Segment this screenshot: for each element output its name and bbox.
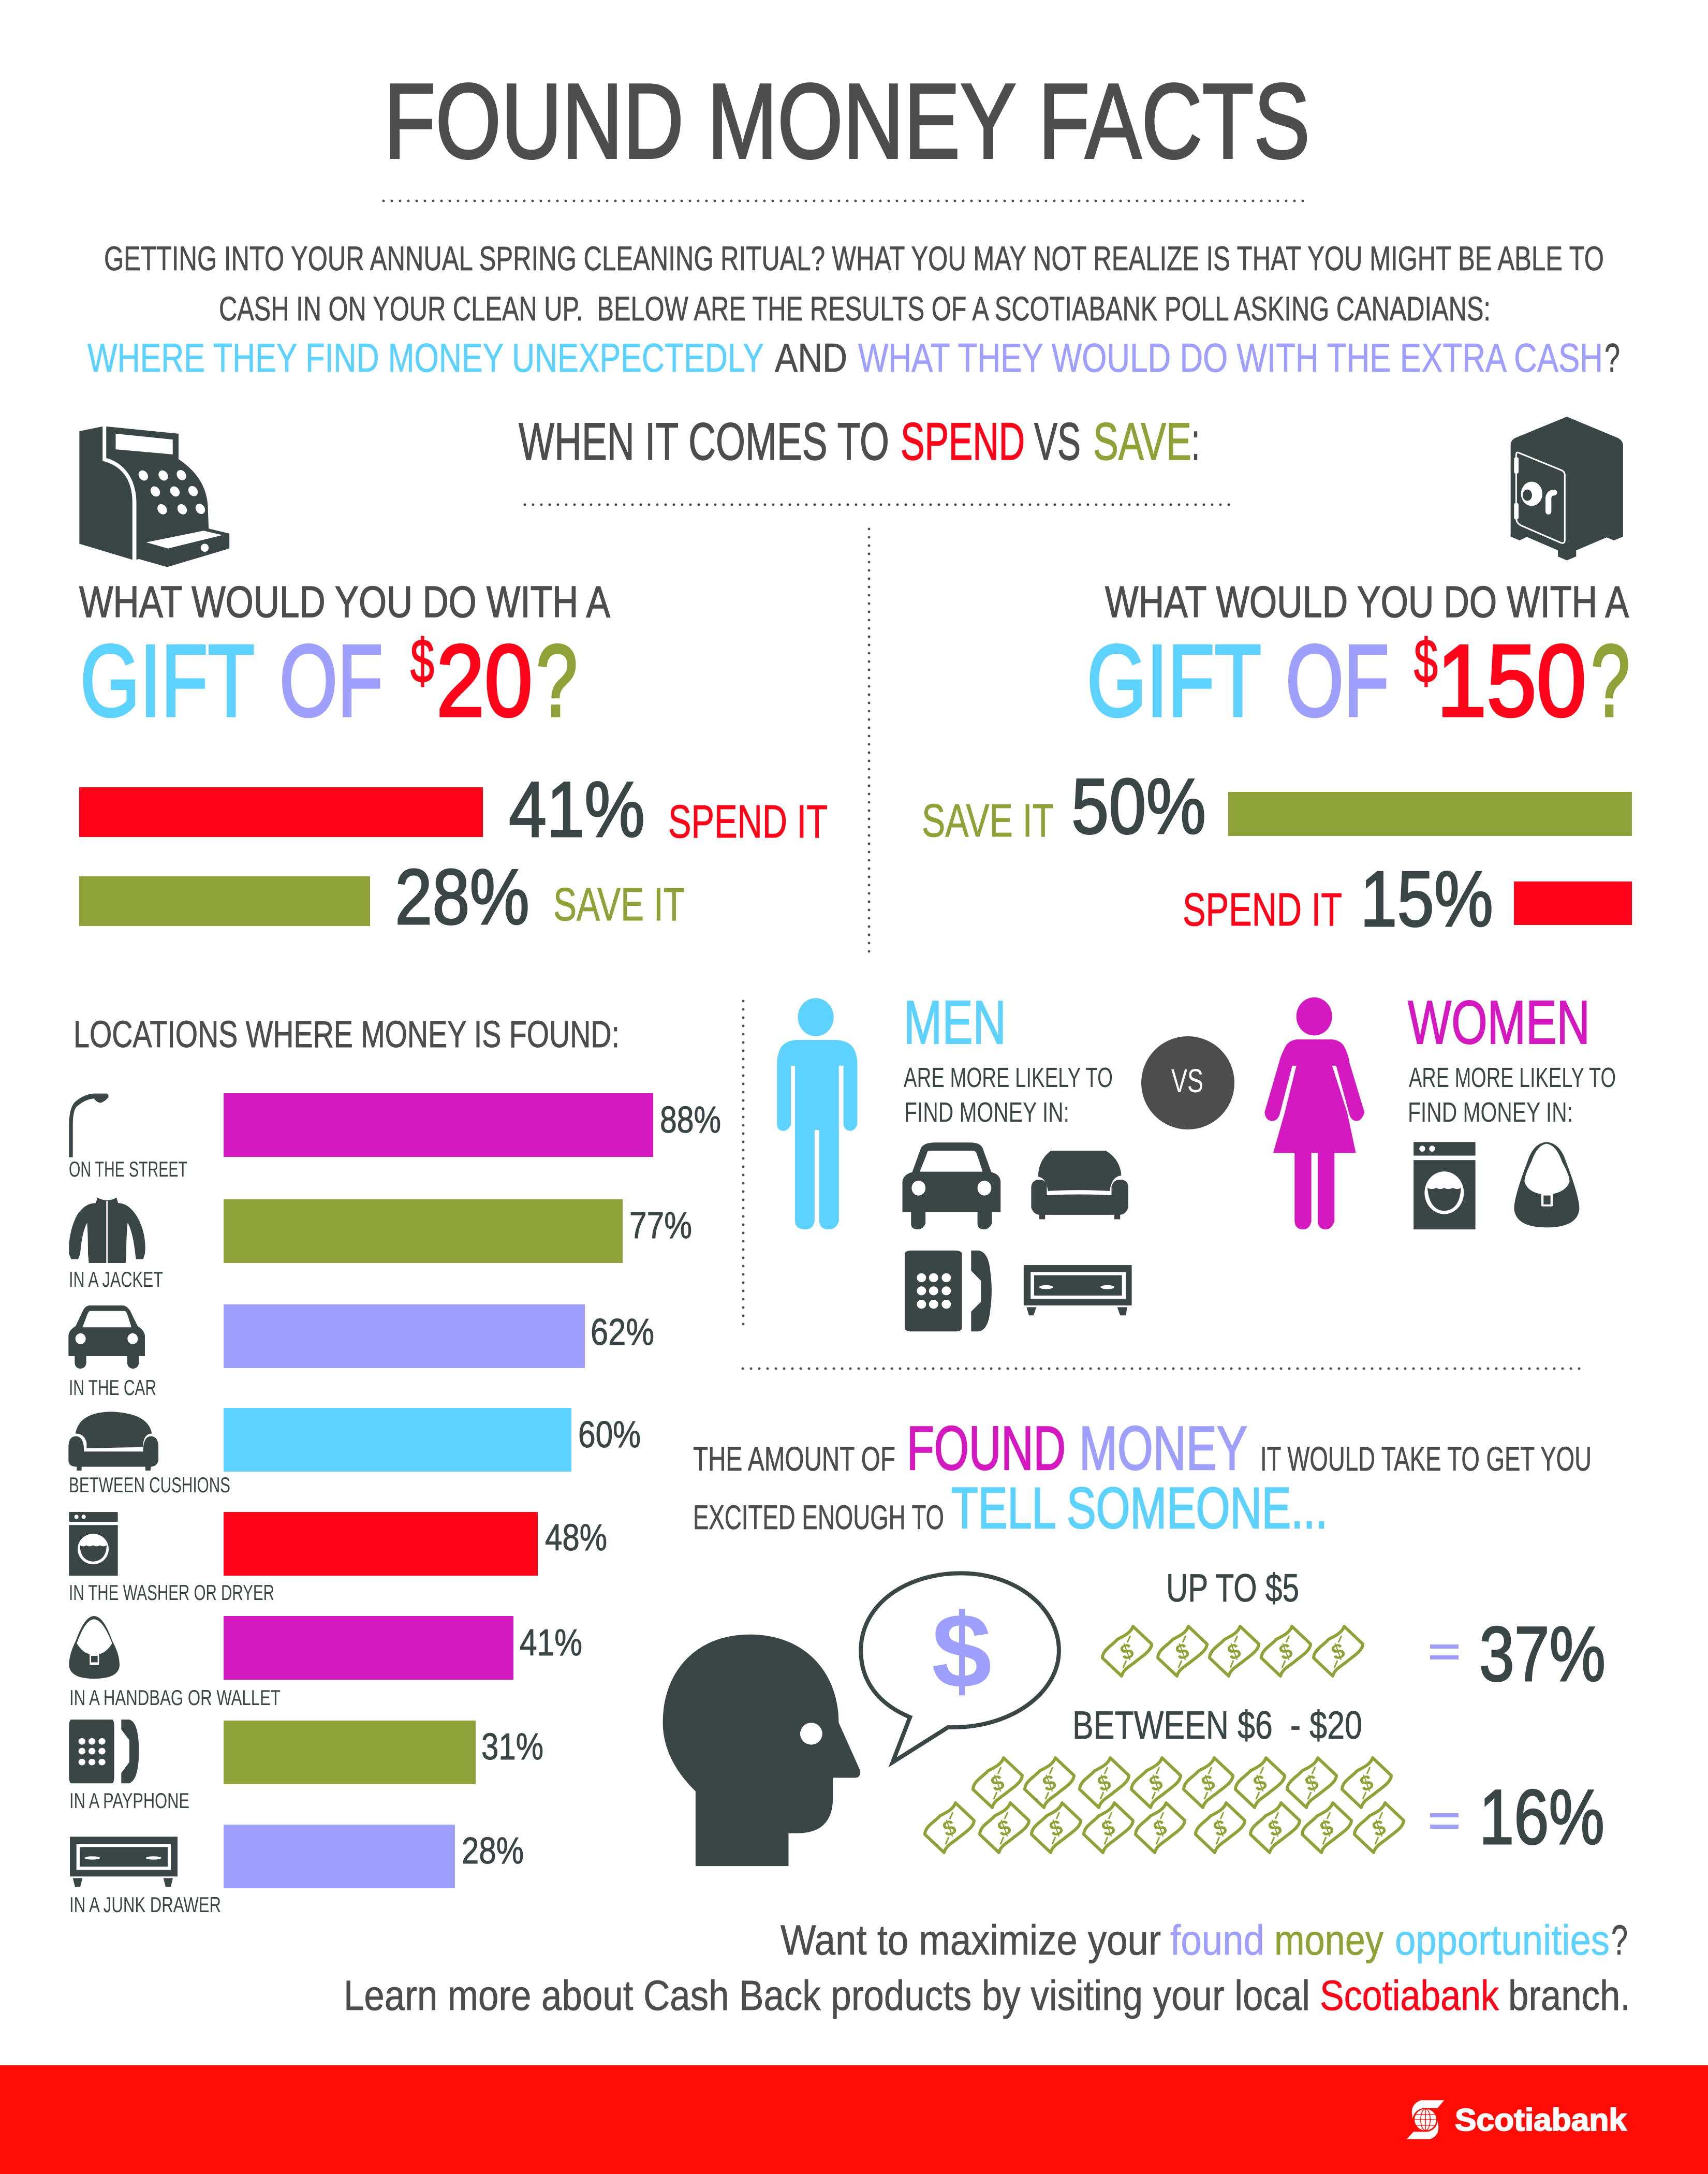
panel: gift of $20: 28% xyxy=(395,853,529,941)
bar: in a payphone: IN A PAYPHONE xyxy=(69,1788,189,1813)
panel: gift of $150: 150 xyxy=(1437,624,1586,738)
bar: in a jacket xyxy=(69,1199,692,1291)
bills: up to $5: $ xyxy=(1172,1638,1192,1665)
icon: woman xyxy=(1264,997,1364,1229)
bills: up to $5: $ xyxy=(1328,1638,1348,1665)
heading: locations: LOCATIONS WHERE MONEY IS FOUND: xyxy=(73,1014,620,1055)
panel: gift of $20: 41% xyxy=(509,766,645,854)
heading: tell someone: FOUND xyxy=(907,1414,1066,1483)
bar: in a payphone: 31% xyxy=(481,1726,543,1768)
panel: gift of $20: GIFT xyxy=(80,624,255,738)
figures and icons xyxy=(777,997,1579,1331)
icon: payphone xyxy=(69,1720,139,1783)
icon: head in profile xyxy=(663,1635,860,1866)
icon: washer xyxy=(69,1512,118,1576)
panel: gift of $20: SPEND IT xyxy=(668,796,828,848)
bills: between $6 and $20: $ xyxy=(1317,1814,1336,1842)
footer band xyxy=(0,2065,1708,2174)
value: 16%: 16% xyxy=(1479,1773,1604,1860)
closing call to action: Learn more about Cash Back products by visiting your local xyxy=(344,1972,1310,2019)
panel: gift of $20: $ xyxy=(410,626,434,696)
icon: junk drawer xyxy=(1024,1265,1132,1315)
icon: armchair xyxy=(1031,1151,1128,1220)
logo: Scotiabank: Scotiabank xyxy=(1455,2103,1627,2137)
panel: gift of $150: 50% xyxy=(1071,762,1206,850)
panel: gift of $150 xyxy=(922,578,1632,943)
icon: car front xyxy=(903,1142,1000,1229)
men label: FIND MONEY IN: xyxy=(904,1097,1069,1128)
intro text xyxy=(87,239,1620,380)
bills: between $6 and $20 xyxy=(925,1758,1404,1853)
closing call to action: Want to maximize your xyxy=(781,1917,1161,1964)
bills: between $6 and $20: $ xyxy=(1094,1769,1114,1797)
panel: gift of $20: ? xyxy=(536,624,578,738)
bar: in a junk drawer xyxy=(69,1825,524,1917)
bills: between $6 and $20: $ xyxy=(939,1814,959,1842)
heading: tell someone: THE AMOUNT OF xyxy=(693,1439,895,1478)
bills: between $6 and $20: $ xyxy=(1046,1814,1066,1842)
bills: up to $5: $ xyxy=(1224,1638,1244,1665)
heading: spend vs save: SPEND xyxy=(901,412,1025,471)
bar: in a handbag or wallet: 41% xyxy=(520,1622,582,1664)
icon: man xyxy=(777,998,857,1229)
heading: spend vs save: SAVE xyxy=(1093,412,1191,471)
bar: in the washer or dryer: 48% xyxy=(545,1517,607,1559)
icon: handbag xyxy=(1514,1142,1579,1227)
panel: gift of $20: 20 xyxy=(436,624,533,738)
closing call to action: branch. xyxy=(1508,1972,1630,2019)
icon: safe xyxy=(1511,417,1623,561)
bar: spend 41% xyxy=(79,787,483,837)
bar: in a handbag or wallet xyxy=(69,1616,582,1710)
intro text: AND xyxy=(775,335,847,380)
heading: spend vs save: WHEN IT COMES TO xyxy=(519,412,889,471)
equals: 16% xyxy=(1430,1813,1459,1829)
bar: in a payphone xyxy=(69,1721,543,1813)
bills: between $6 and $20: $ xyxy=(1265,1814,1285,1842)
closing call to action xyxy=(344,1917,1630,2019)
intro text: ? xyxy=(1604,335,1620,380)
closing call to action: money xyxy=(1274,1917,1383,1964)
women label xyxy=(1408,988,1616,1128)
heading: spend vs save: : xyxy=(1191,412,1200,471)
closing call to action: found xyxy=(1170,1917,1264,1964)
bar: between cushions: BETWEEN CUSHIONS xyxy=(69,1473,230,1497)
value: 37%: 37% xyxy=(1479,1610,1606,1697)
icon: handbag xyxy=(69,1616,120,1679)
bills: between $6 and $20: $ xyxy=(1150,1814,1170,1842)
women label: WOMEN xyxy=(1408,988,1590,1057)
icon: cash register xyxy=(79,427,229,567)
icon: street lamp xyxy=(69,1094,109,1157)
bar: on the street xyxy=(69,1093,721,1181)
logo: Scotiabank xyxy=(1407,2100,1627,2139)
panel: gift of $150: GIFT xyxy=(1087,624,1261,738)
bar: in a handbag or wallet: IN A HANDBAG OR WALLET xyxy=(69,1685,281,1710)
bar: on the street: ON THE STREET xyxy=(69,1157,187,1181)
closing call to action: opportunities xyxy=(1395,1917,1610,1964)
bar: in a junk drawer: IN A JUNK DRAWER xyxy=(69,1892,221,1917)
panel: gift of $20: WHAT WOULD YOU DO WITH A xyxy=(79,578,610,627)
bills: between $6 and $20: $ xyxy=(1198,1769,1218,1797)
panel: gift of $20: OF xyxy=(279,624,383,738)
men label xyxy=(904,988,1113,1128)
bills: between $6 and $20: $ xyxy=(1146,1769,1166,1797)
label: between $6 - $20: BETWEEN $6 - $20 xyxy=(1072,1703,1362,1747)
bar: between cushions xyxy=(69,1408,641,1497)
vs circle: VS xyxy=(1171,1062,1203,1099)
bar: in a jacket: IN A JACKET xyxy=(69,1267,163,1291)
men label: ARE MORE LIKELY TO xyxy=(904,1062,1113,1093)
men label: MEN xyxy=(904,988,1006,1057)
bills: between $6 and $20: $ xyxy=(1098,1814,1118,1842)
icon: car side xyxy=(68,1305,145,1369)
icon: speech bubble with dollar xyxy=(861,1573,1059,1762)
icons: locations xyxy=(68,1094,178,1887)
bar: in the car xyxy=(69,1304,654,1400)
bar: in the car: IN THE CAR xyxy=(69,1375,156,1400)
bar: spend 15%: SPEND IT xyxy=(1183,884,1342,936)
heading: tell someone: TELL SOMEONE... xyxy=(951,1476,1328,1540)
panel: gift of $150: 15% xyxy=(1360,855,1493,943)
icon: washer xyxy=(1413,1142,1476,1229)
vs circle xyxy=(1141,1036,1234,1129)
bills: between $6 and $20: $ xyxy=(1250,1769,1270,1797)
bills: between $6 and $20: $ xyxy=(1302,1769,1321,1797)
panel: gift of $150: $ xyxy=(1414,626,1438,696)
icon: speech bubble with dollar: $ xyxy=(932,1592,992,1710)
bar: in a junk drawer: 28% xyxy=(462,1830,524,1872)
bar: save 50%: SAVE IT xyxy=(922,795,1054,847)
icon: payphone xyxy=(905,1251,992,1331)
intro text: WHERE THEY FIND MONEY UNEXPECTEDLY xyxy=(87,335,764,380)
bills: between $6 and $20: $ xyxy=(1357,1769,1376,1797)
bar: save 28% xyxy=(79,876,370,926)
heading: spend vs save: VS xyxy=(1034,412,1081,471)
heading: tell someone xyxy=(693,1414,1592,1540)
logo mark xyxy=(1407,2100,1444,2139)
bar: in the car: 62% xyxy=(591,1312,654,1353)
bills: up to $5 xyxy=(1102,1626,1363,1676)
label: up to $5: UP TO $5 xyxy=(1166,1566,1299,1610)
women label: FIND MONEY IN: xyxy=(1408,1097,1573,1128)
chart: locations bars xyxy=(69,1093,721,1917)
bar: in the washer or dryer xyxy=(69,1512,607,1605)
heading: tell someone: EXCITED ENOUGH TO xyxy=(693,1498,944,1536)
bills: between $6 and $20: $ xyxy=(1039,1769,1059,1797)
closing call to action: ? xyxy=(1611,1917,1628,1964)
women label: ARE MORE LIKELY TO xyxy=(1409,1062,1616,1093)
bar: in the washer or dryer: IN THE WASHER OR DRYER xyxy=(69,1580,274,1605)
bills: up to $5: $ xyxy=(1276,1638,1295,1665)
icon: jacket xyxy=(69,1198,145,1263)
bills: between $6 and $20: $ xyxy=(1369,1814,1389,1842)
panel: gift of $20: SAVE IT xyxy=(553,879,685,931)
bar: in a jacket: 77% xyxy=(629,1205,692,1246)
icon: sofa xyxy=(68,1412,158,1471)
icon: junk drawer xyxy=(70,1837,178,1887)
panel: gift of $20 xyxy=(79,578,828,941)
equals: 37% xyxy=(1430,1644,1459,1659)
panel: gift of $150: OF xyxy=(1286,624,1389,738)
heading: tell someone: MONEY xyxy=(1079,1414,1247,1483)
bar: between cushions: 60% xyxy=(578,1414,641,1456)
bills: between $6 and $20: $ xyxy=(988,1769,1007,1797)
title: FOUND MONEY FACTS xyxy=(384,62,1310,181)
panel: gift of $150: ? xyxy=(1591,624,1630,738)
bills: up to $5: $ xyxy=(1117,1638,1137,1665)
bar: on the street: 88% xyxy=(660,1099,721,1141)
bills: between $6 and $20: $ xyxy=(1210,1814,1230,1842)
closing call to action: Scotiabank xyxy=(1320,1972,1499,2019)
bills: between $6 and $20: $ xyxy=(994,1814,1014,1842)
panel: men vs women xyxy=(777,988,1616,1331)
